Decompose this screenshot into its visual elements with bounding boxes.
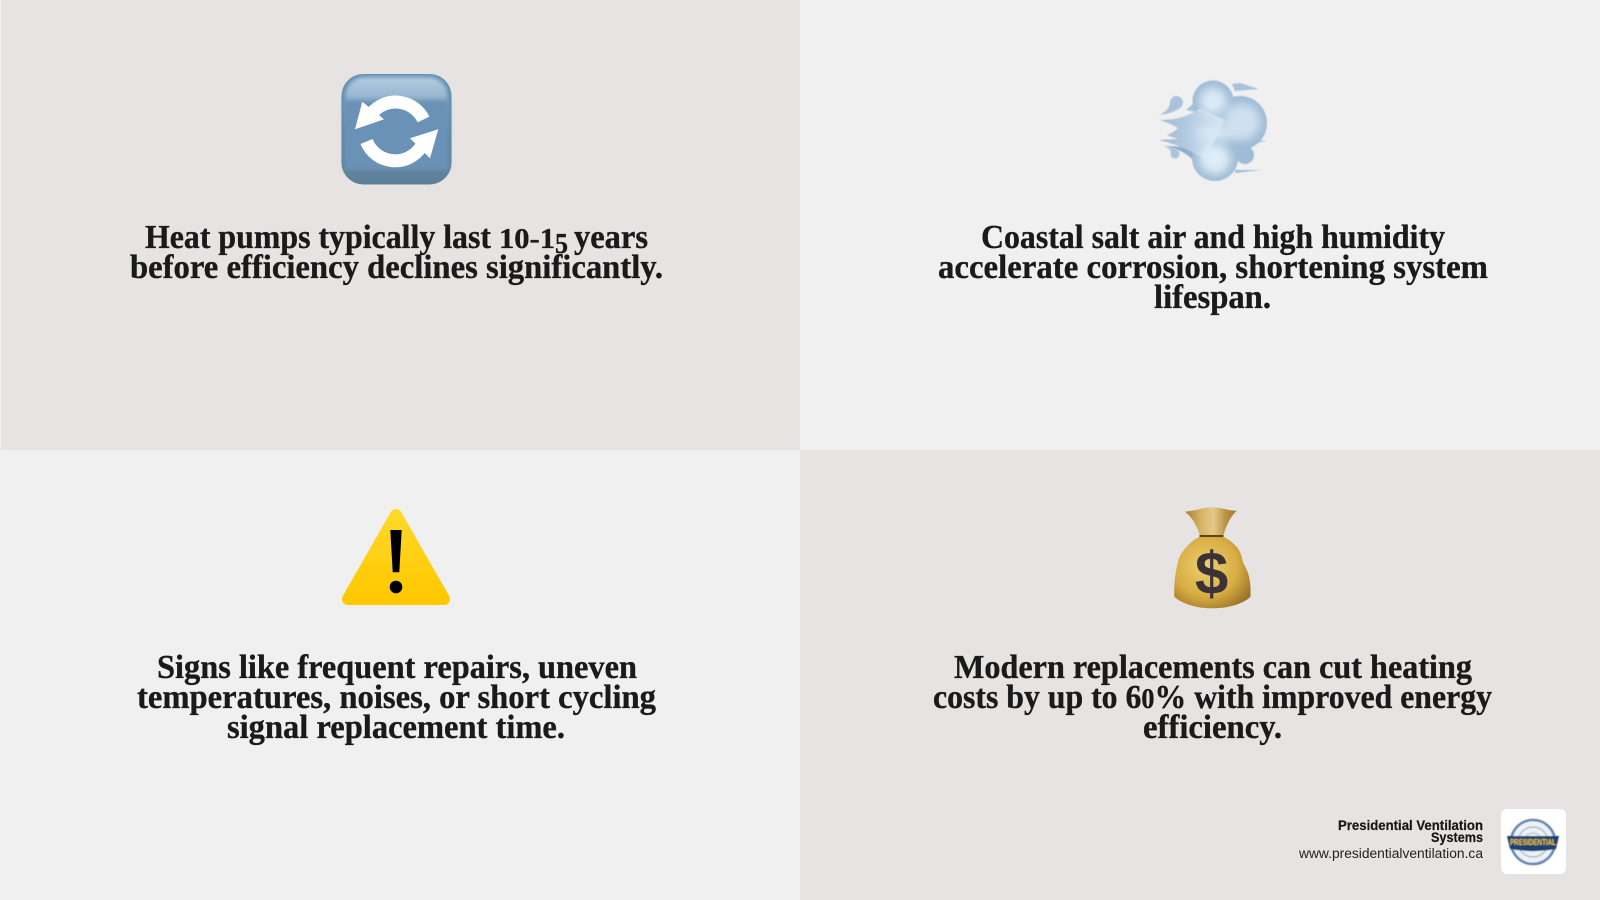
footer: company name and website: www.presidentialventilation.ca	[1298, 846, 1483, 861]
icon: money bag	[1174, 507, 1251, 608]
dollar sign: $	[1195, 540, 1228, 607]
heading: energy savings: costs by up to 60% with improved energy	[933, 679, 1492, 716]
heading: energy savings	[933, 649, 1492, 746]
heading: heat pump lifespan: 5	[555, 229, 568, 260]
heading: coastal corrosion: Coastal salt air and high humidity	[981, 219, 1445, 256]
footer: company name and website: Systems	[1431, 830, 1483, 845]
panel: top right background	[800, 0, 1600, 450]
heading: warning signs: signal replacement time.	[227, 709, 565, 746]
heading: coastal corrosion	[938, 219, 1488, 316]
logo badge	[1501, 809, 1566, 874]
footer: company name and website: Presidential Ventilation	[1338, 818, 1483, 833]
icon: refresh arrows	[342, 74, 452, 184]
heading: heat pump lifespan	[130, 219, 663, 286]
heading: heat pump lifespan: before efficiency declines significantly.	[130, 249, 663, 286]
panel: bottom right background	[800, 450, 1600, 900]
panel: top left background	[1, 0, 800, 450]
footer: company name and website	[1298, 818, 1483, 861]
heading: energy savings: efficiency.	[1143, 709, 1282, 746]
heading: energy savings: Modern replacements can cut heating	[954, 649, 1472, 686]
heading: heat pump lifespan: Heat pumps typically last	[145, 219, 492, 256]
panel: bottom left background	[0, 450, 800, 900]
heading: warning signs: temperatures, noises, or short cycling	[137, 679, 656, 716]
heading: coastal corrosion: lifespan.	[1154, 279, 1271, 316]
heading: heat pump lifespan: years	[574, 219, 648, 256]
heading: warning signs	[137, 649, 656, 746]
heading: warning signs: Signs like frequent repairs, uneven	[157, 649, 637, 686]
heading: coastal corrosion: accelerate corrosion, shortening system	[938, 249, 1488, 286]
logo badge: PRESIDENTIAL	[1510, 838, 1556, 847]
icon: wind gust cloud	[1160, 80, 1268, 182]
icon: warning triangle	[348, 515, 444, 599]
heading: heat pump lifespan: 10-1	[499, 224, 555, 255]
